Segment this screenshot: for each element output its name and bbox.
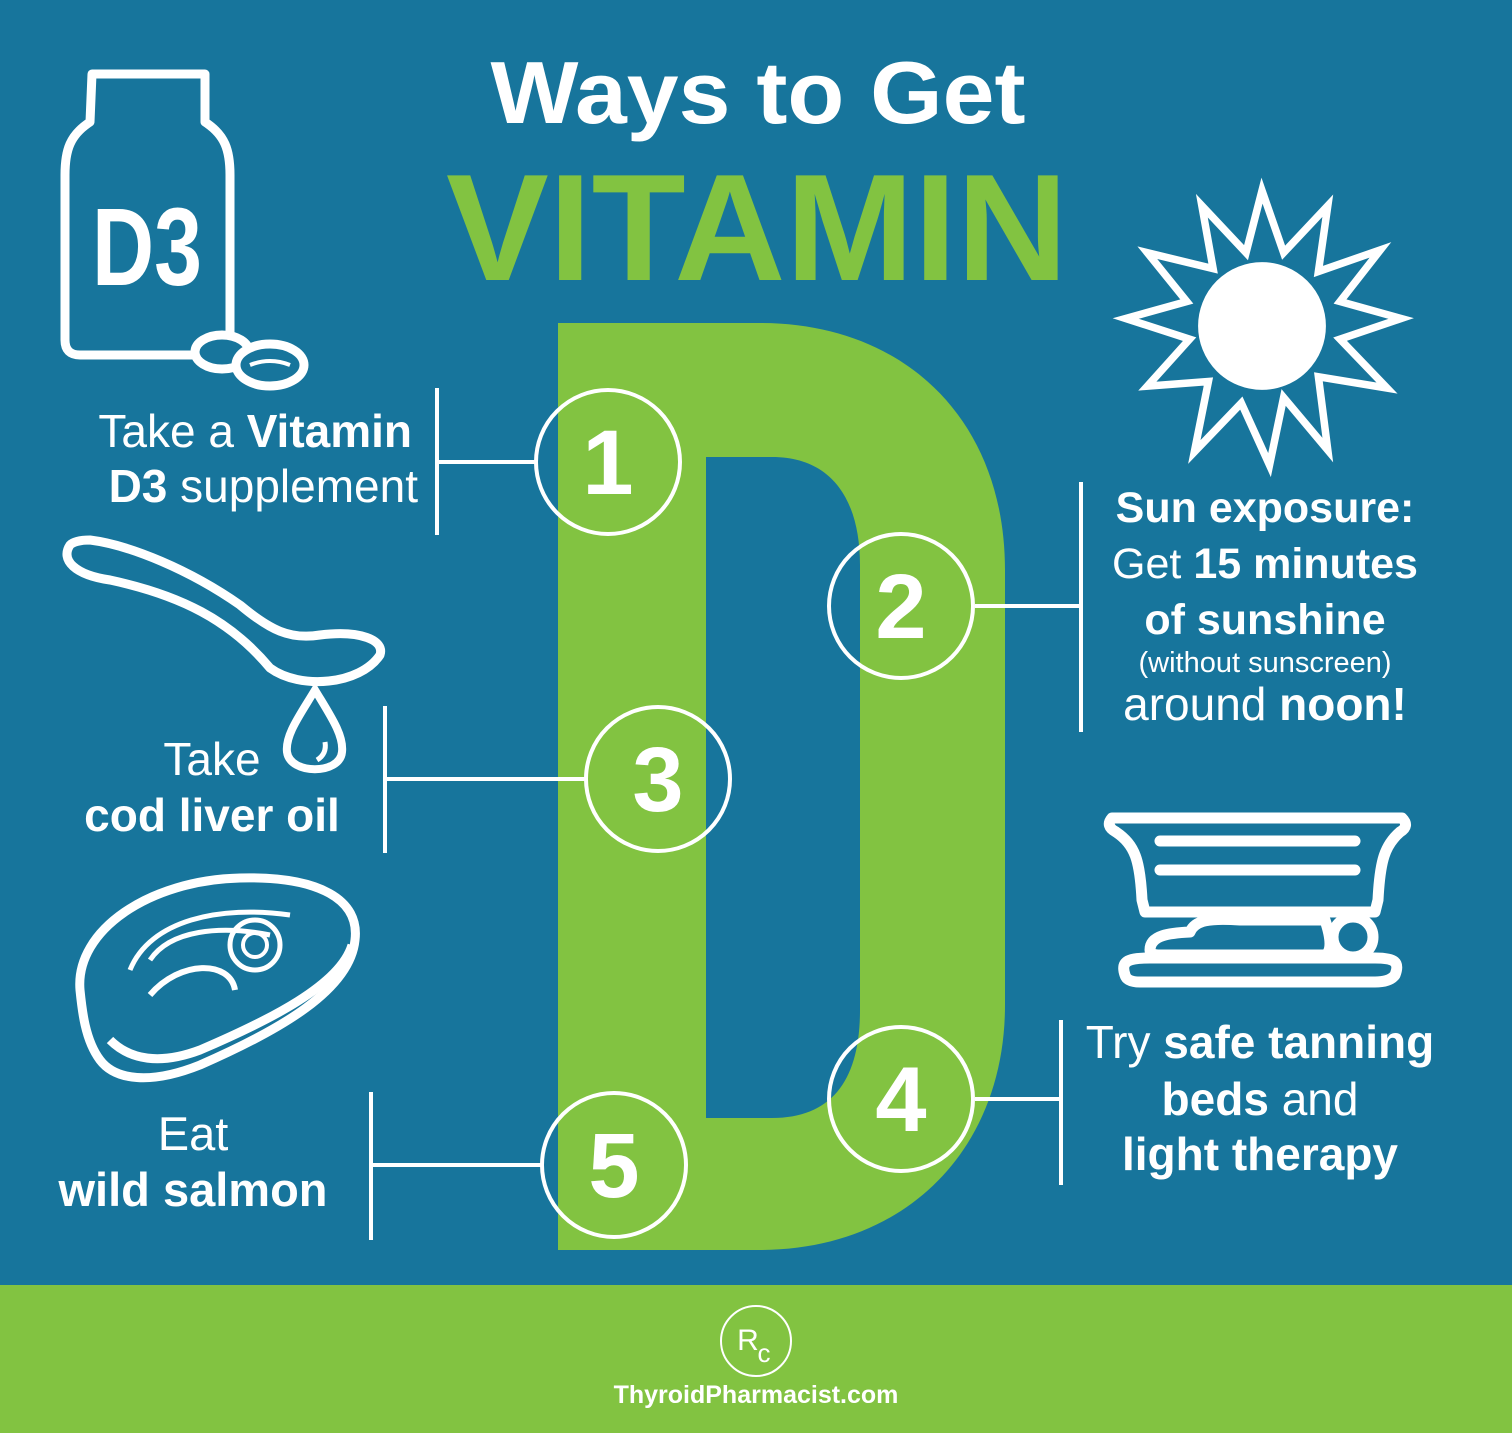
text: item 4: beds and — [1162, 1073, 1358, 1125]
numbers: 3 — [632, 729, 684, 831]
icon: sun — [1126, 191, 1401, 465]
text: item 2 — [1112, 484, 1418, 730]
text: item 1 — [98, 405, 418, 512]
text: item 3: cod liver oil — [84, 789, 340, 841]
icon: spoon — [67, 540, 381, 682]
text: item 2: Sun exposure: — [1116, 484, 1414, 532]
numbers: 1 — [582, 412, 634, 514]
logo: RC: R — [737, 1324, 759, 1357]
number circles — [536, 390, 973, 1237]
text: item 4 — [1086, 1016, 1434, 1180]
icon: tanning bed — [1109, 818, 1406, 982]
text: item 4: light therapy — [1122, 1128, 1398, 1180]
logo: RC — [721, 1306, 791, 1376]
big letter D — [558, 323, 1005, 1250]
title: VITAMIN — [446, 143, 1068, 313]
title: Ways to Get — [490, 43, 1026, 142]
text: item 2: around noon! — [1123, 678, 1407, 730]
numbers: 4 — [875, 1049, 927, 1151]
text: item 4: Try safe tanning — [1086, 1016, 1434, 1068]
text: item 2: (without sunscreen) — [1138, 647, 1392, 679]
text: item 5: wild salmon — [58, 1163, 328, 1216]
text: item 3: Take — [163, 733, 261, 785]
text: item 2: of sunshine — [1144, 596, 1386, 644]
icon: D3 bottle: D3 — [92, 186, 202, 309]
text: item 5 — [58, 1107, 328, 1216]
numbers: 5 — [588, 1115, 640, 1217]
logo: RC: c — [758, 1338, 770, 1368]
text: item 2: Get 15 minutes — [1112, 540, 1418, 588]
connector lines — [371, 388, 1081, 1240]
text: item 1: Take a Vitamin — [98, 405, 412, 457]
numbers — [582, 412, 927, 1217]
icon: oil drop — [287, 690, 342, 769]
text: item 5: Eat — [158, 1107, 228, 1160]
text: item 1: D3 supplement — [109, 460, 418, 512]
icon: D3 bottle — [65, 74, 304, 386]
footer text: ThyroidPharmacist.com — [614, 1381, 898, 1409]
text: item 3 — [84, 733, 340, 841]
numbers: 2 — [875, 556, 927, 658]
title — [446, 43, 1068, 313]
footer band — [0, 1285, 1512, 1433]
icon: salmon steak — [80, 878, 355, 1078]
